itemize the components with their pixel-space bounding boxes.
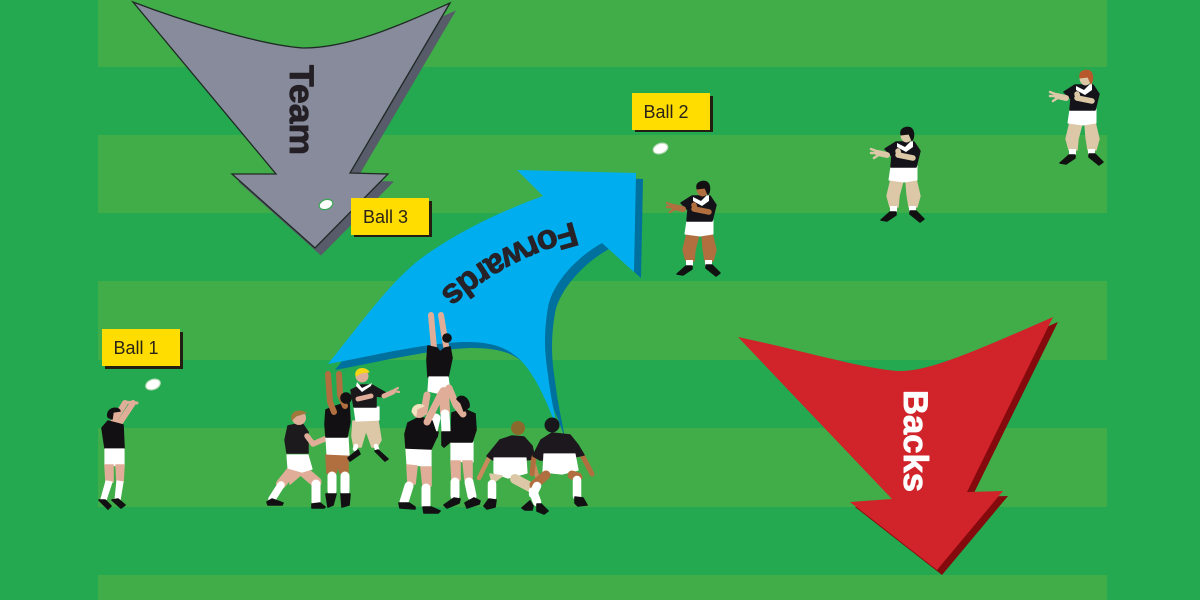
player: outer back: [1050, 70, 1103, 165]
label: Ball 2: Ball 2: [644, 102, 689, 122]
ball 2: [652, 141, 669, 156]
player: front lifter: [399, 394, 441, 513]
arrow: Forwards: [328, 170, 643, 434]
player: crouching forward left: [479, 421, 548, 514]
label: Ball 3: [351, 198, 432, 237]
player: crouching forward right: [522, 418, 592, 510]
label: Backs: Backs: [896, 390, 934, 492]
player: blond support: [348, 369, 399, 461]
player: jumper with brown skin: [325, 374, 351, 507]
ball 1: [144, 377, 162, 392]
label: Ball 1: Ball 1: [114, 338, 159, 358]
arrow: Backs: [738, 317, 1058, 575]
label: Ball 2: [632, 93, 713, 132]
label: Team: Team: [282, 65, 320, 155]
ball 3: [318, 198, 334, 211]
arrow: Team: [133, 2, 456, 256]
player: lifter with fair hair: [267, 411, 327, 508]
player: mid back: [871, 127, 924, 222]
player: thrower: [99, 402, 137, 509]
label: Ball 1: [102, 329, 183, 369]
label: Forwards: Forwards: [442, 222, 578, 304]
player: lifted jumper: [427, 315, 452, 447]
player: receiver at Ball 2: [667, 181, 720, 276]
player: back lifter: [444, 388, 480, 508]
label: Ball 3: Ball 3: [363, 207, 408, 227]
